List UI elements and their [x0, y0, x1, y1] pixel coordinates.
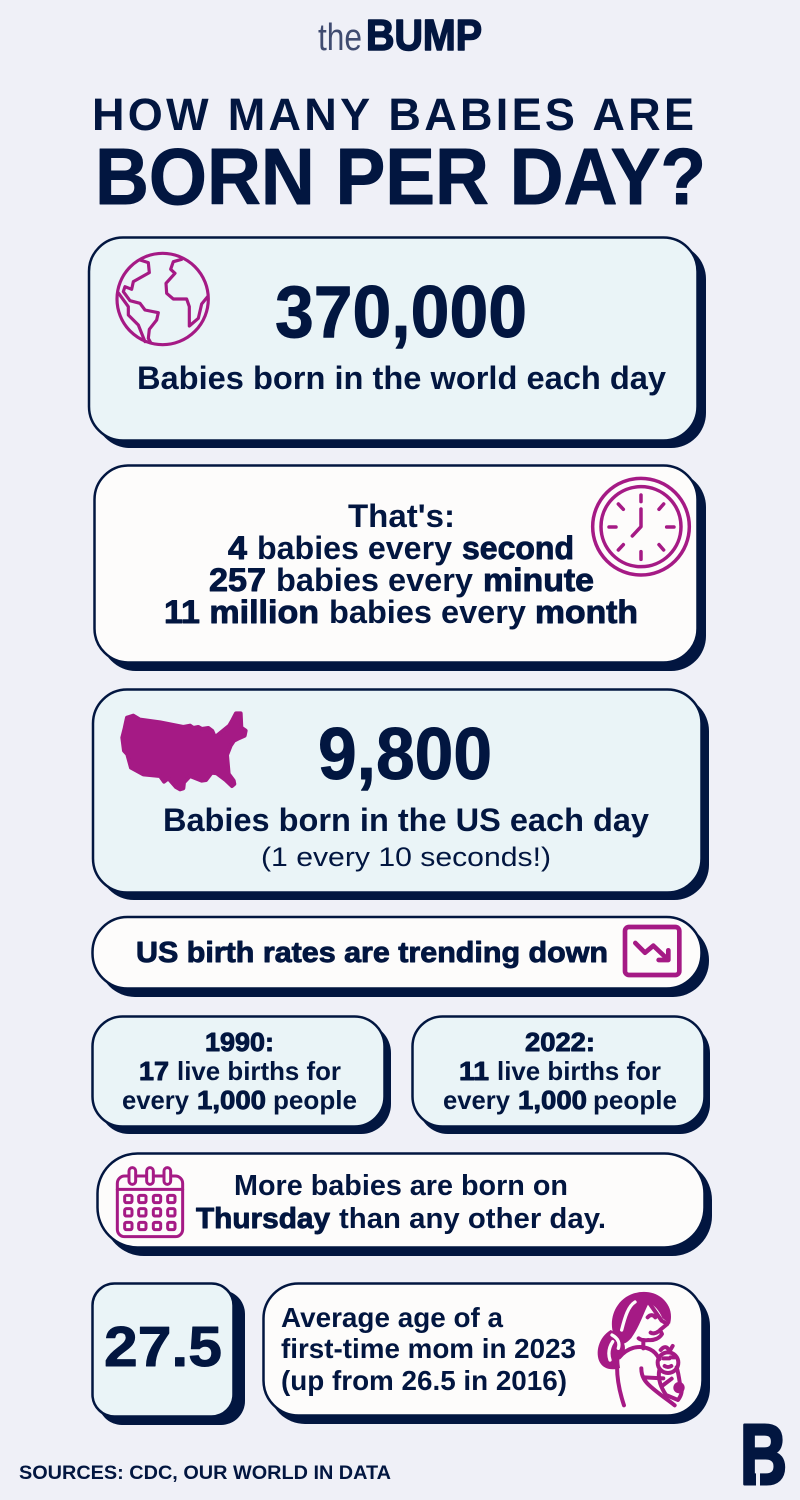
line: per month: babies every: [329, 594, 526, 630]
panel: 2022 rate: people: [593, 1085, 677, 1115]
line: per minute: 257: [209, 562, 266, 598]
panel: 1990 rate: 1,000: [197, 1085, 266, 1115]
panel: Thursday fact: [98, 1154, 712, 1256]
line: That's: That's:: [348, 498, 455, 534]
big number: 9,800: 9,800: [318, 714, 492, 795]
text: Thursday fact: More babies are born on: [234, 1170, 568, 1202]
icon: US map: [122, 713, 246, 789]
panel: 1990 rate: live births for: [177, 1056, 341, 1086]
panel: 1990 rate: 17: [139, 1056, 169, 1086]
panel: babies born in the world: [89, 238, 706, 448]
logo: theBUMP: BUMP: [366, 11, 482, 60]
panel: 2022 rate: 1,000: [518, 1085, 587, 1115]
icon: calendar: [117, 1168, 183, 1237]
line: per month: month: [535, 594, 638, 630]
line: per minute: babies every: [276, 562, 473, 598]
text: Thursday fact: [196, 1170, 606, 1235]
panel: 1990 rate: 1990:: [205, 1027, 274, 1057]
text: Thursday fact: than any other day.: [339, 1203, 606, 1235]
title: [92, 89, 706, 221]
panel: 2022 rate: every: [443, 1085, 511, 1115]
panel: births per time unit: [94, 466, 706, 671]
sources: SOURCES: CDC, OUR WORLD IN DATA: [19, 1463, 391, 1484]
panel: 2022 rate: 11: [459, 1056, 489, 1086]
panel: 2022 rate: live births for: [497, 1056, 661, 1086]
panel: babies born in the US: [93, 690, 709, 900]
text: trend statement: US birth rates are trending down: [136, 937, 608, 969]
text: average age: Average age of a: [281, 1302, 504, 1333]
big number: 370,000: 370,000: [275, 272, 527, 353]
logo: theBUMP: the: [318, 17, 362, 59]
panel: 1990 rate: [92, 1016, 391, 1134]
panel: 27.5 stat: [92, 1284, 245, 1425]
icon: clock: [593, 478, 689, 575]
icon: mother and baby: [598, 1292, 685, 1405]
line: per minute: minute: [483, 562, 594, 598]
line: per month: [164, 594, 638, 630]
logo: theBUMP: [318, 11, 482, 60]
line: per minute: [209, 562, 594, 598]
text: Thursday fact: Thursday: [196, 1203, 330, 1235]
line: per second: babies every: [257, 530, 452, 566]
line: per second: 4: [228, 530, 247, 566]
icon: globe: [117, 253, 208, 345]
icon: trend down: [625, 927, 679, 975]
panel: 2022 rate: 2022:: [525, 1027, 595, 1057]
caption: US: Babies born in the US each day: [163, 802, 649, 838]
caption: world: Babies born in the world each day: [137, 360, 666, 396]
text: average age: (up from 26.5 in 2016): [281, 1365, 567, 1396]
text: average age: [281, 1302, 576, 1396]
panel: 27.5 stat: 27.5: [104, 1315, 222, 1379]
line: per second: [228, 530, 574, 566]
panel: 2022 rate: [412, 1016, 710, 1134]
panel: 1990 rate: people: [273, 1085, 357, 1115]
text: average age: first-time mom in 2023: [281, 1333, 576, 1364]
caption: rate note: (1 every 10 seconds!): [261, 842, 551, 872]
panel: trending down: [92, 917, 709, 997]
line: per month: 11 million: [164, 594, 319, 630]
title: BORN PER DAY?: [95, 132, 706, 221]
title: HOW MANY BABIES ARE: [92, 89, 694, 140]
line: per second: second: [462, 530, 574, 566]
panel: 1990 rate: every: [122, 1085, 190, 1115]
panel: average age of first-time mom: [264, 1284, 710, 1424]
